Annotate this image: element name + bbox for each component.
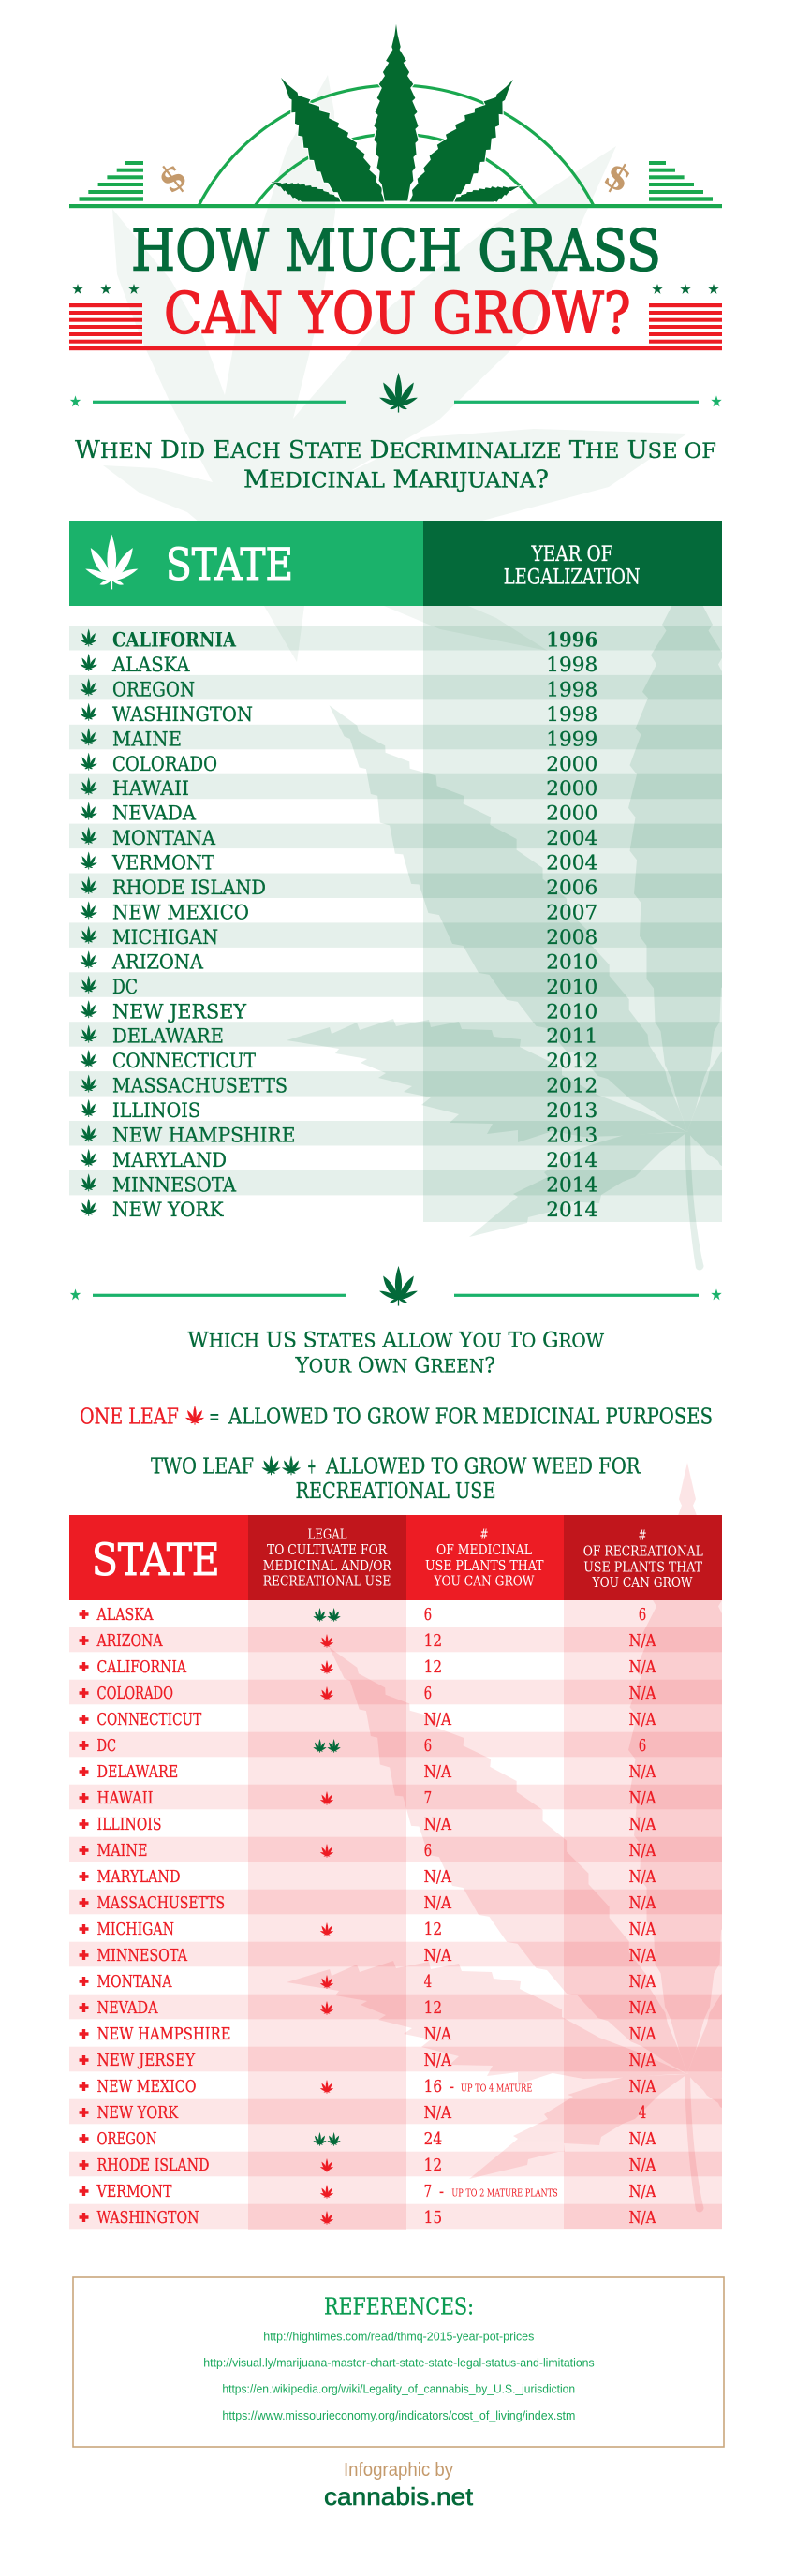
recreational plant counts: N/A: [629, 1973, 656, 1992]
icon: left dollar sign: $: [149, 154, 195, 201]
heading: second question: WHICH US STATES ALLOW YOU TO GROW: [187, 1329, 604, 1353]
medicinal plant counts: 12: [424, 2156, 442, 2175]
state names: NEW MEXICO: [97, 2078, 197, 2097]
header: legal to cultivate: TO CULTIVATE FOR: [267, 1542, 388, 1558]
legend: two leaf: [151, 1454, 641, 1504]
medicinal plant counts: 7: [424, 1789, 432, 1808]
medicinal plant counts: 6: [424, 1685, 432, 1703]
recreational plant counts: N/A: [629, 1763, 656, 1782]
years: 2011: [546, 1025, 597, 1049]
header: recreational plants: #: [639, 1527, 646, 1543]
state names: HAWAII: [112, 777, 189, 801]
heading: first question: MEDICINAL MARIJUANA?: [243, 466, 549, 494]
table stripes: [69, 1600, 722, 2230]
heading: second question: [187, 1329, 604, 1377]
recreational plant counts: N/A: [629, 1685, 656, 1703]
reference links: [203, 2330, 595, 2422]
state names: MARYLAND: [112, 1149, 227, 1172]
recreational plant counts: N/A: [629, 1894, 656, 1913]
medicinal plant counts: [424, 1606, 558, 2228]
header: year of legalization: LEGALIZATION: [504, 566, 641, 589]
heading: first question: [75, 436, 716, 494]
background: pale leaf watermark: [103, 75, 687, 662]
legend: one leaf: ALLOWED TO GROW FOR MEDICINAL PURPOSES: [228, 1406, 713, 1430]
state names: MAINE: [97, 1842, 148, 1861]
recreational plant counts: N/A: [629, 2078, 656, 2097]
recreational plant counts: 6: [639, 1737, 646, 1756]
header: medicinal plants: YOU CAN GROW: [434, 1574, 535, 1590]
state names: WASHINGTON: [97, 2209, 199, 2228]
state names: CALIFORNIA: [112, 629, 236, 652]
heading: second question: YOUR OWN GREEN?: [295, 1353, 495, 1377]
header: state: [69, 1515, 248, 1600]
medicinal plant counts: N/A: [424, 1711, 451, 1730]
recreational plant counts: N/A: [629, 2130, 656, 2149]
table stripes: [69, 606, 722, 1222]
row crosses: [79, 1610, 88, 2222]
years: 2006: [546, 876, 597, 900]
header: recreational plants: YOU CAN GROW: [592, 1575, 693, 1591]
header: medicinal plants: USE PLANTS THAT: [425, 1558, 544, 1574]
years: 2012: [546, 1050, 597, 1073]
panel: grow table: [69, 1515, 722, 2230]
state names: NEVADA: [112, 802, 197, 826]
reference links: https://en.wikipedia.org/wiki/Legality_of_cannabis_by_U.S._jurisdiction: [222, 2383, 575, 2396]
references heading: REFERENCES:: [324, 2294, 474, 2320]
icon: right green stairs: [649, 161, 713, 201]
state names: VERMONT: [96, 2183, 172, 2201]
medicinal plant counts: 6: [424, 1737, 432, 1756]
years: [546, 629, 597, 1222]
state names: WASHINGTON: [112, 703, 253, 727]
years: 1998: [546, 654, 597, 677]
reference links: http://hightimes.com/read/thmq-2015-year-pot-prices: [263, 2330, 534, 2343]
header: state: [69, 521, 423, 606]
watermark: green leaf behind table: [287, 606, 722, 1270]
header: recreational plants: OF RECREATIONAL: [583, 1543, 703, 1559]
legal leaf icons: [314, 1609, 340, 2224]
header: medicinal plants: [406, 1515, 564, 1600]
state names: DC: [112, 976, 138, 999]
legend: one leaf: ONE LEAF: [80, 1406, 179, 1430]
medicinal plant counts: N/A: [424, 1894, 451, 1913]
medicinal plant counts: UP TO 2 MATURE PLANTS: [451, 2187, 558, 2199]
header: recreational plants: [564, 1515, 722, 1600]
recreational plant counts: [629, 1606, 656, 2228]
reference links: http://visual.ly/marijuana-master-chart-state-state-legal-status-and-limitations: [203, 2357, 595, 2370]
legend: one leaf: [80, 1406, 713, 1430]
state names: NEW YORK: [112, 1199, 225, 1222]
icon: outer and inner arcs: [199, 85, 594, 206]
years: 2013: [546, 1099, 597, 1123]
medicinal plant counts: 7: [424, 2183, 432, 2201]
years: 2014: [546, 1199, 597, 1222]
recreational plant counts: N/A: [629, 2025, 656, 2044]
title line 2: CAN YOU GROW?: [164, 281, 631, 346]
years: 2010: [546, 1000, 597, 1023]
years: 2007: [546, 901, 597, 925]
baseline rule: [69, 204, 722, 208]
state names: RHODE ISLAND: [97, 2156, 210, 2175]
state names: MONTANA: [112, 827, 216, 850]
medicinal plant counts: 24: [424, 2130, 442, 2149]
state names: MASSACHUSETTS: [112, 1075, 287, 1098]
medicinal plant counts: N/A: [424, 2025, 451, 2044]
recreational plant counts: N/A: [629, 1816, 656, 1834]
medicinal plant counts: N/A: [424, 2052, 451, 2070]
medicinal plant counts: -: [439, 2183, 444, 2201]
state names: [111, 629, 296, 1222]
state names: MICHIGAN: [97, 1921, 174, 1939]
state names: DELAWARE: [97, 1763, 178, 1782]
medicinal plant counts: N/A: [424, 1816, 451, 1834]
state names: OREGON: [112, 678, 195, 701]
state names: DC: [97, 1737, 116, 1756]
recreational plant counts: N/A: [629, 2156, 656, 2175]
years: 2004: [546, 852, 597, 876]
legend: two leaf: RECREATIONAL USE: [296, 1479, 496, 1504]
state names: DELAWARE: [112, 1025, 224, 1049]
state names: NEVADA: [97, 1999, 158, 2018]
header: recreational plants: USE PLANTS THAT: [583, 1559, 702, 1575]
recreational plant counts: 6: [639, 1606, 646, 1625]
header: medicinal plants: #: [479, 1526, 489, 1542]
state names: MICHIGAN: [112, 926, 218, 949]
header: medicinal plants: OF MEDICINAL: [436, 1542, 532, 1558]
header: year of legalization: [423, 521, 722, 606]
row icons: [81, 629, 96, 1215]
years: 2012: [546, 1075, 597, 1098]
legend: two leaf: +: [307, 1454, 317, 1479]
recreational plant counts: N/A: [629, 2209, 656, 2228]
panel: legalization table: [69, 521, 722, 1222]
state names: RHODE ISLAND: [112, 876, 266, 900]
flag: right stars and stripes: [649, 284, 722, 344]
state names: [96, 1606, 230, 2228]
recreational plant counts: N/A: [629, 1632, 656, 1651]
state names: ALASKA: [96, 1606, 154, 1625]
medicinal plant counts: 15: [424, 2209, 442, 2228]
title line 1: HOW MUCH GRASS: [131, 219, 661, 285]
state names: ILLINOIS: [97, 1816, 161, 1834]
recreational plant counts: N/A: [629, 1921, 656, 1939]
recreational plant counts: N/A: [629, 1842, 656, 1861]
recreational plant counts: N/A: [629, 1711, 656, 1730]
medicinal plant counts: N/A: [424, 1763, 451, 1782]
years: 1999: [546, 728, 597, 751]
medicinal plant counts: 12: [424, 1632, 442, 1651]
years: 1998: [546, 678, 597, 701]
medicinal plant counts: UP TO 4 MATURE: [461, 2083, 532, 2094]
years: 2013: [546, 1124, 597, 1148]
medicinal plant counts: N/A: [424, 1947, 451, 1965]
recreational plant counts: N/A: [629, 1868, 656, 1887]
medicinal plant counts: 4: [424, 1973, 432, 1992]
credit: cannabis.net: cannabis.net: [324, 2482, 474, 2510]
recreational plant counts: 4: [639, 2104, 646, 2123]
legend: two leaf: ALLOWED TO GROW WEED FOR: [325, 1454, 641, 1479]
years: 2000: [546, 753, 597, 776]
recreational plant counts: N/A: [629, 1999, 656, 2018]
header: state: STATE: [92, 1535, 220, 1585]
watermark: red leaf behind table: [287, 1463, 722, 2212]
years: 2000: [546, 777, 597, 801]
medicinal plant counts: 16: [424, 2078, 442, 2097]
state names: MONTANA: [97, 1973, 172, 1992]
icon: left green stairs: [79, 161, 143, 201]
credit: infographic by: Infographic by: [344, 2460, 453, 2480]
medicinal plant counts: 6: [424, 1842, 432, 1861]
state names: VERMONT: [111, 852, 214, 876]
state names: COLORADO: [112, 753, 217, 776]
years: 2014: [546, 1149, 597, 1172]
state names: MINNESOTA: [112, 1173, 237, 1197]
reference links: https://www.missourieconomy.org/indicators/cost_of_living/index.stm: [222, 2409, 575, 2422]
icon: right dollar sign: $: [597, 152, 640, 201]
state names: MARYLAND: [97, 1868, 180, 1887]
state names: NEW YORK: [97, 2104, 179, 2123]
medicinal plant counts: 12: [424, 1921, 442, 1939]
state names: NEW JERSEY: [112, 1000, 247, 1023]
header: year of legalization: YEAR OF: [531, 543, 612, 567]
years: 2004: [546, 827, 597, 850]
state names: CONNECTICUT: [97, 1711, 202, 1730]
state names: COLORADO: [97, 1685, 173, 1703]
state names: NEW HAMPSHIRE: [112, 1124, 296, 1148]
medicinal plant counts: 12: [424, 1999, 442, 2018]
years: 2010: [546, 976, 597, 999]
state names: NEW HAMPSHIRE: [97, 2025, 230, 2044]
state names: ILLINOIS: [112, 1099, 200, 1123]
state names: MAINE: [112, 728, 182, 751]
years: 1996: [546, 629, 597, 652]
state names: ARIZONA: [111, 950, 204, 974]
medicinal plant counts: -: [450, 2078, 454, 2097]
medicinal plant counts: 12: [424, 1658, 442, 1677]
state names: CALIFORNIA: [97, 1658, 186, 1677]
state names: ARIZONA: [96, 1632, 163, 1651]
header emblem: [69, 24, 722, 208]
recreational plant counts: N/A: [629, 1947, 656, 1965]
years: 2008: [546, 926, 597, 949]
header: state: STATE: [166, 539, 293, 590]
header: legal to cultivate: MEDICINAL AND/OR: [263, 1558, 392, 1574]
state names: HAWAII: [97, 1789, 154, 1808]
icon: large leaf: [270, 24, 522, 202]
state names: MINNESOTA: [97, 1947, 187, 1965]
state names: MASSACHUSETTS: [97, 1894, 225, 1913]
recreational plant counts: N/A: [629, 2183, 656, 2201]
state names: OREGON: [97, 2130, 157, 2149]
state names: ALASKA: [111, 654, 190, 677]
flag: left stars and stripes: [69, 284, 142, 344]
recreational plant counts: N/A: [629, 1789, 656, 1808]
divider with leaf: [70, 1267, 722, 1305]
medicinal plant counts: 6: [424, 1606, 432, 1625]
legend: one leaf: =: [209, 1406, 220, 1430]
heading: first question: WHEN DID EACH STATE DECRIMINALIZE THE USE OF: [75, 436, 716, 464]
recreational plant counts: N/A: [629, 1658, 656, 1677]
state names: NEW JERSEY: [97, 2052, 196, 2070]
medicinal plant counts: N/A: [424, 2104, 451, 2123]
header: legal to cultivate: [248, 1515, 406, 1600]
years: 2014: [546, 1173, 597, 1197]
legend: two leaf: TWO LEAF: [151, 1454, 254, 1479]
divider with leaf: [70, 374, 722, 412]
state names: CONNECTICUT: [112, 1050, 256, 1073]
state names: NEW MEXICO: [112, 901, 249, 925]
medicinal plant counts: N/A: [424, 1868, 451, 1887]
years: 2000: [546, 802, 597, 826]
years: 2010: [546, 950, 597, 974]
years: 1998: [546, 703, 597, 727]
recreational plant counts: N/A: [629, 2052, 656, 2070]
panel: references: [73, 2277, 724, 2447]
header: legal to cultivate: RECREATIONAL USE: [263, 1574, 391, 1590]
header: legal to cultivate: LEGAL: [307, 1526, 347, 1542]
